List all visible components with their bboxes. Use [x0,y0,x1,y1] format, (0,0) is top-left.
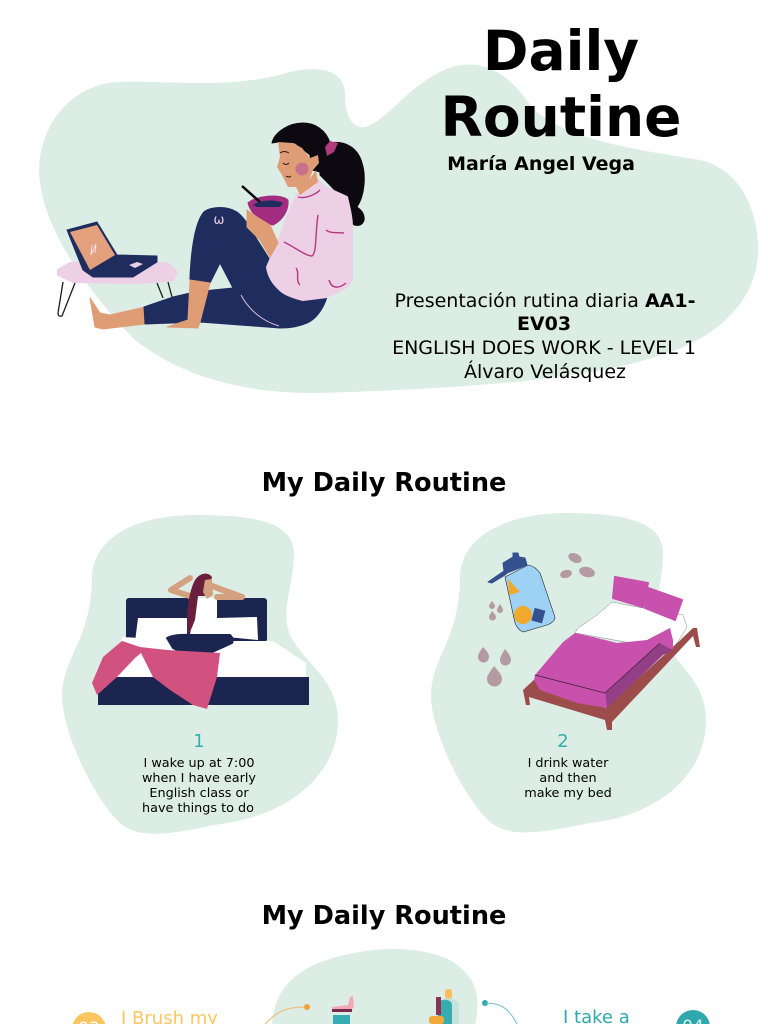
legs [144,208,327,328]
icon: toothbrush [332,996,354,1024]
hand and arm [247,210,278,257]
face [203,579,213,599]
title: Daily [483,19,639,83]
step number: 2 [557,731,569,752]
subtitle text block: Presentación rutina diaria AA1- [395,290,695,312]
laptop [67,222,157,277]
panel: step 2 [431,513,706,832]
subtitle text block: EV03 [517,313,571,335]
step text [142,756,256,816]
woman torso [190,598,217,637]
illustration: water bottle [488,553,555,632]
blanket [92,641,220,709]
face [277,142,319,187]
subtitle text block: Álvaro Velásquez [464,360,626,383]
foot and calf [90,298,145,329]
step 3 connector [265,1004,310,1024]
step text [524,756,612,801]
blob 2 [431,513,706,832]
sweater [267,180,352,300]
hair [187,574,212,637]
neck [296,170,318,195]
cheek [296,162,308,176]
title [441,19,681,149]
step number: 1 [193,731,205,752]
mattress top [535,628,673,693]
headboard [126,598,267,642]
pillows [135,618,187,642]
subtitle text block: ENGLISH DOES WORK - LEVEL 1 [392,337,696,359]
panel: steps 3 and 4 [72,949,710,1024]
mattress [117,637,306,677]
illustration: made bed [523,577,700,730]
step 4 connector [482,1000,517,1024]
panel: step 1 [62,515,338,834]
sweater squiggles [284,190,346,287]
step text: have things to do [142,801,254,816]
mattress side [534,675,607,708]
step text: when I have early [142,771,256,786]
bowl contents [253,201,283,207]
step 4 number badge [676,1010,710,1024]
pillows [613,577,648,607]
step 3 number badge [72,1012,106,1024]
hair top [272,123,330,172]
blob 3 [272,949,478,1024]
crossed legs [167,635,233,657]
facial features [280,152,291,177]
icon: bottles [429,989,459,1024]
bed frame [523,628,700,730]
sheet [575,602,687,650]
step text: English class or [149,786,249,801]
ponytail [320,142,364,225]
knee mark: ω [214,213,224,228]
step text: I wake up at 7:00 [143,756,255,771]
bowl [248,196,288,225]
subtitle text block [392,290,696,383]
illustration: woman eating with laptop [58,123,364,329]
panel: cover blob [39,64,758,393]
step text: and then [539,771,597,786]
illustration: woman stretching on bed [92,574,309,709]
bed base [98,677,309,705]
pant seam [241,295,279,326]
spoon [242,186,260,202]
arms [171,578,242,597]
step text: I drink water [528,756,609,771]
heading: my daily routine 1: My Daily Routine [262,468,506,498]
supporting arm [167,280,210,328]
blob 1 [62,515,338,834]
hair tie [325,141,338,156]
table [58,263,177,316]
illustration: water drops [478,551,596,687]
step text: make my bed [524,786,612,801]
title: Routine [441,85,681,149]
author name: María Angel Vega [447,153,635,175]
heading: my daily routine 2: My Daily Routine [262,901,506,931]
